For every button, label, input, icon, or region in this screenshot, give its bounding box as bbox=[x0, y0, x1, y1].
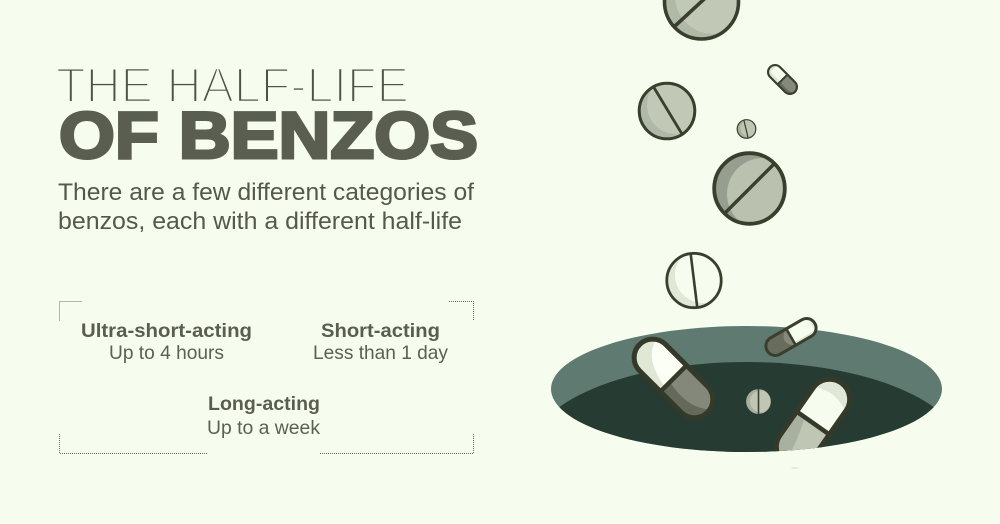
category: short-acting: Short-acting bbox=[321, 320, 440, 342]
category: ultra-short-acting: Up to 4 hours bbox=[109, 342, 224, 364]
tablet: tiny bbox=[737, 120, 758, 138]
tablet: large centre bbox=[712, 151, 787, 226]
capsule: small top right bbox=[767, 64, 798, 95]
hole bbox=[551, 326, 942, 452]
tablet: top, cut off by page edge bbox=[664, 0, 751, 39]
tablet: medium left bbox=[638, 82, 696, 140]
category: long-acting: Up to a week bbox=[207, 417, 320, 439]
tablet: inside hole bbox=[746, 389, 772, 414]
intro text: There are a few different categories of bbox=[58, 179, 474, 206]
title line 2: OF BENZOS bbox=[59, 98, 478, 172]
tablet: white bbox=[665, 252, 723, 310]
intro text bbox=[58, 179, 474, 235]
speck below hole bbox=[791, 467, 799, 469]
category: long-acting bbox=[207, 393, 320, 439]
dotted bracket frame bbox=[60, 302, 474, 454]
title line 1: THE HALF-LIFE bbox=[56, 59, 409, 113]
category: ultra-short-acting: Ultra-short-acting bbox=[81, 320, 252, 342]
category: ultra-short-acting bbox=[81, 320, 252, 364]
category: long-acting: Long-acting bbox=[208, 393, 320, 415]
capsule: lower, falling past hole edge bbox=[774, 377, 852, 452]
title bbox=[56, 59, 478, 172]
capsule: large left in hole bbox=[632, 336, 716, 420]
infographic canvas bbox=[58, 0, 942, 469]
capsule: above hole edge bbox=[764, 317, 818, 357]
category: short-acting: Less than 1 day bbox=[313, 342, 448, 364]
intro text: benzos, each with a different half-life bbox=[58, 208, 462, 235]
category: short-acting bbox=[313, 320, 448, 364]
